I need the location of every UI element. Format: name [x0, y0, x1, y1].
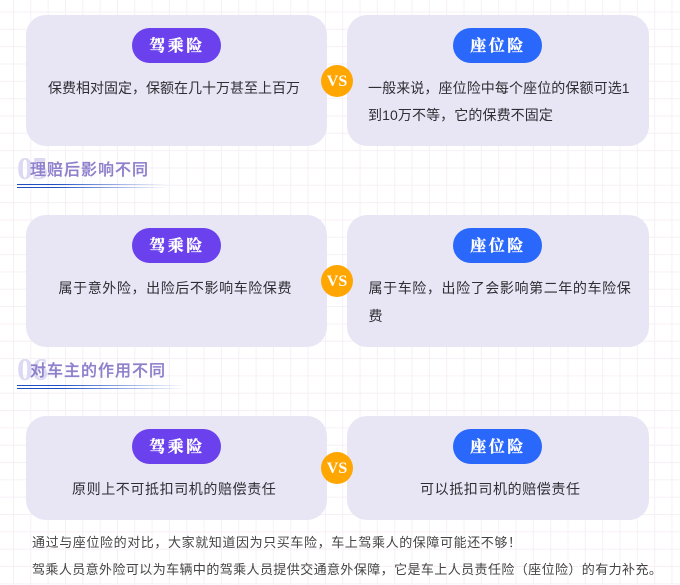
panel: row 1 seat insurance	[347, 15, 649, 146]
pill: seat insurance: 座位险	[470, 38, 526, 55]
panel: row 1 driver insurance	[26, 15, 327, 146]
pill: driver insurance	[132, 228, 221, 263]
text: seat owner role: 可以抵扣司机的赔偿责任	[420, 481, 581, 497]
heading text: 理赔后影响不同	[30, 162, 149, 179]
pill: seat insurance	[453, 28, 542, 63]
text: closing line 2: 驾乘人员意外险可以为车辆中的驾乘人员提供交通意外保障，它是车上人员责任险（座位险）的有力补充。	[32, 562, 662, 577]
number 05: 05	[17, 150, 47, 186]
text: closing line 1: 通过与座位险的对比，大家就知道因为只买车险，车上驾乘人的保障可能还不够！	[32, 535, 522, 550]
pill: driver insurance: 驾乘险	[149, 38, 205, 55]
icon: VS badge row 2: VS	[327, 273, 347, 290]
pill: driver insurance: 驾乘险	[149, 439, 205, 456]
pill: driver insurance	[132, 429, 221, 464]
pill: seat insurance	[453, 429, 542, 464]
text: seat claim effect: 属于车险，出险了会影响第二年的车险保	[368, 280, 631, 296]
pill: driver insurance	[132, 28, 221, 63]
panel: row 3 driver insurance	[26, 416, 327, 520]
pill: seat insurance	[453, 228, 542, 263]
text: seat premium: 一般来说，座位险中每个座位的保额可选1	[368, 80, 630, 96]
text: seat claim effect	[368, 280, 631, 324]
text: seat premium	[368, 80, 630, 123]
icon: VS badge row 1: VS	[327, 73, 347, 90]
text: seat claim effect: 费	[368, 308, 383, 324]
panel: row 2 driver insurance	[26, 215, 327, 347]
pill: seat insurance: 座位险	[470, 439, 526, 456]
icon: VS badge row 3: VS	[327, 460, 347, 477]
heading text: 对车主的作用不同	[30, 363, 166, 380]
panel: row 3 seat insurance	[347, 416, 649, 520]
pill: seat insurance: 座位险	[470, 238, 526, 255]
heading: section 06	[17, 351, 180, 389]
text: seat premium: 到10万不等，它的保费不固定	[368, 107, 553, 123]
icon: VS badge row 1	[321, 65, 353, 97]
text: driver owner role: 原则上不可抵扣司机的赔偿责任	[72, 481, 276, 497]
icon: VS badge row 3	[321, 452, 353, 484]
pill: driver insurance: 驾乘险	[149, 238, 205, 255]
number 06: 06	[17, 351, 47, 387]
heading: section 05	[17, 150, 162, 188]
icon: VS badge row 2	[321, 265, 353, 297]
text: driver claim effect: 属于意外险，出险后不影响车险保费	[58, 280, 292, 296]
panel: row 2 seat insurance	[347, 215, 649, 347]
text: driver premium: 保费相对固定，保额在几十万甚至上百万	[48, 80, 300, 96]
